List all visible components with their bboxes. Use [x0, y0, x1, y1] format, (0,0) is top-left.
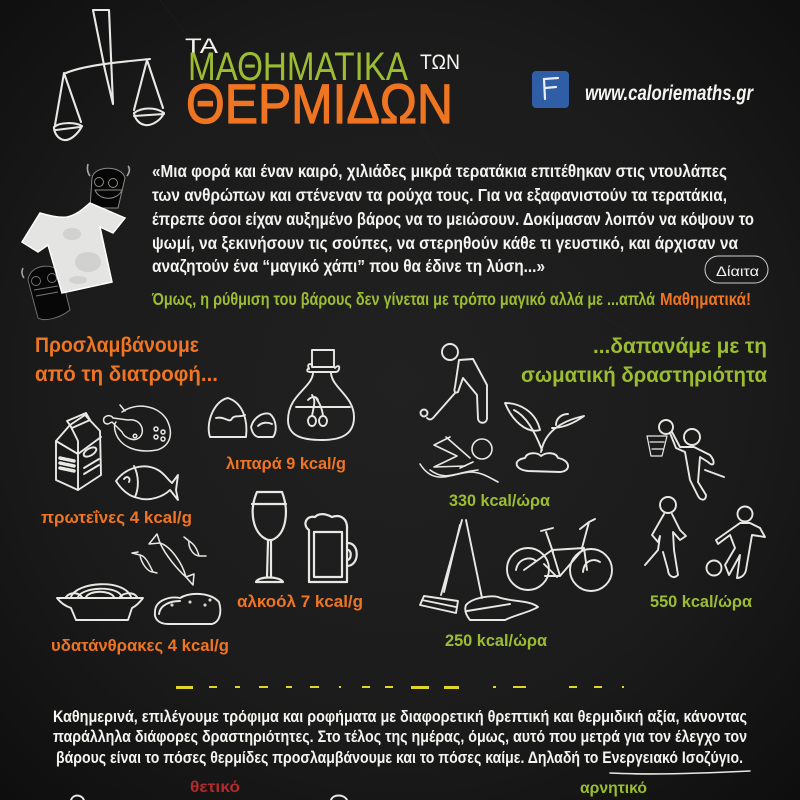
icon: hazelnuts — [209, 398, 276, 437]
icon: chicken — [104, 405, 170, 451]
label: 550 kcal: 550 kcal/ώρα — [650, 592, 753, 611]
clipped yellow heading remnants — [176, 686, 624, 689]
intro quote: αναζητούν ένα “μαγικό χάπι” που θα έδινε τη λύση...» — [152, 256, 545, 277]
summary paragraph — [53, 708, 747, 767]
label: negative: αρνητικό — [580, 780, 647, 797]
icon: basketball player — [647, 420, 724, 500]
green tagline: Όμως, η ρύθμιση του βάρους δεν γίνεται με τρόπο μαγικό αλλά με ...απλά — [151, 289, 655, 309]
monster: top — [87, 164, 129, 208]
icon: swimmer — [420, 437, 498, 482]
label: 330 kcal: 330 kcal/ώρα — [449, 491, 551, 510]
heading: expenditure: ...δαπανάμε με τη — [593, 335, 767, 358]
website address: www.caloriemaths.gr — [585, 82, 754, 105]
title — [185, 35, 460, 135]
title: line ΜΑΘΗΜΑΤΙΚΑ: ΜΑΘΗΜΑΤΙΚΑ — [188, 45, 408, 89]
heading: intake — [35, 334, 218, 386]
icon: wine glass — [252, 492, 286, 582]
icon: runner — [645, 497, 686, 577]
icon: mop and broom — [420, 520, 538, 620]
intro quote: ψωμί, να ξεκινήσουν τις σούπες, να στερηθούν κάθε τι γευστικό, και άρχισαν να — [152, 233, 738, 254]
intro quote: «Μια φορά και έναν καιρό, χιλιάδες μικρά τερατάκια επιτέθηκαν στις ντουλάπες — [152, 161, 727, 181]
intro quote: των ανθρώπων και στένεναν τα ρούχα τους. Για να εξαφανιστούν τα τερατάκια, — [152, 185, 727, 206]
icon: oil bottle — [288, 350, 354, 440]
monster: bottom — [22, 266, 70, 320]
heading: intake: Προσλαμβάνουμε — [35, 334, 199, 357]
t-shirt — [22, 203, 125, 293]
icon: scales — [54, 10, 164, 140]
heading: intake: από τη διατροφή... — [35, 363, 218, 386]
icon: soccer player — [706, 506, 765, 578]
icon: fish — [116, 466, 178, 500]
label: alcohol: αλκοόλ 7 kcal/g — [237, 592, 363, 611]
heading: expenditure: σωματική δραστηριότητα — [521, 364, 767, 387]
icon: bicycle — [507, 519, 612, 591]
label: positive: θετικό — [190, 779, 240, 796]
label: fats: λιπαρά 9 kcal/g — [226, 454, 346, 473]
green tagline: Μαθηματικά! — [660, 289, 751, 309]
icon: beer mug — [305, 514, 357, 582]
intro quote — [152, 161, 754, 277]
heading: expenditure — [521, 335, 767, 387]
underline stroke — [610, 771, 750, 774]
clipped figure heads — [71, 796, 347, 800]
title: line ΤΩΝ: ΤΩΝ — [420, 51, 460, 74]
label: carbohydrates: υδατάνθρακες 4 kcal/g — [51, 636, 229, 655]
label: proteins: πρωτεΐνες 4 kcal/g — [41, 508, 192, 527]
badge: diet pill: Δίαιτα — [716, 263, 759, 279]
icon: plant sprout — [505, 403, 584, 472]
title: line ΘΕΡΜΙΔΩΝ: ΘΕΡΜΙΔΩΝ — [186, 72, 453, 135]
icon: sweets — [132, 534, 206, 585]
icon: golfer — [420, 344, 487, 423]
icon: bread — [155, 594, 220, 624]
badge: diet pill — [705, 256, 768, 283]
icon: milk carton — [56, 413, 101, 490]
icon: pasta bowl — [57, 584, 143, 620]
title: line ΤΑ: ΤΑ — [185, 35, 218, 58]
illustration: monsters and t-shirt — [22, 164, 129, 320]
icon: facebook badge — [532, 71, 569, 108]
label: 250 kcal: 250 kcal/ώρα — [445, 631, 548, 650]
